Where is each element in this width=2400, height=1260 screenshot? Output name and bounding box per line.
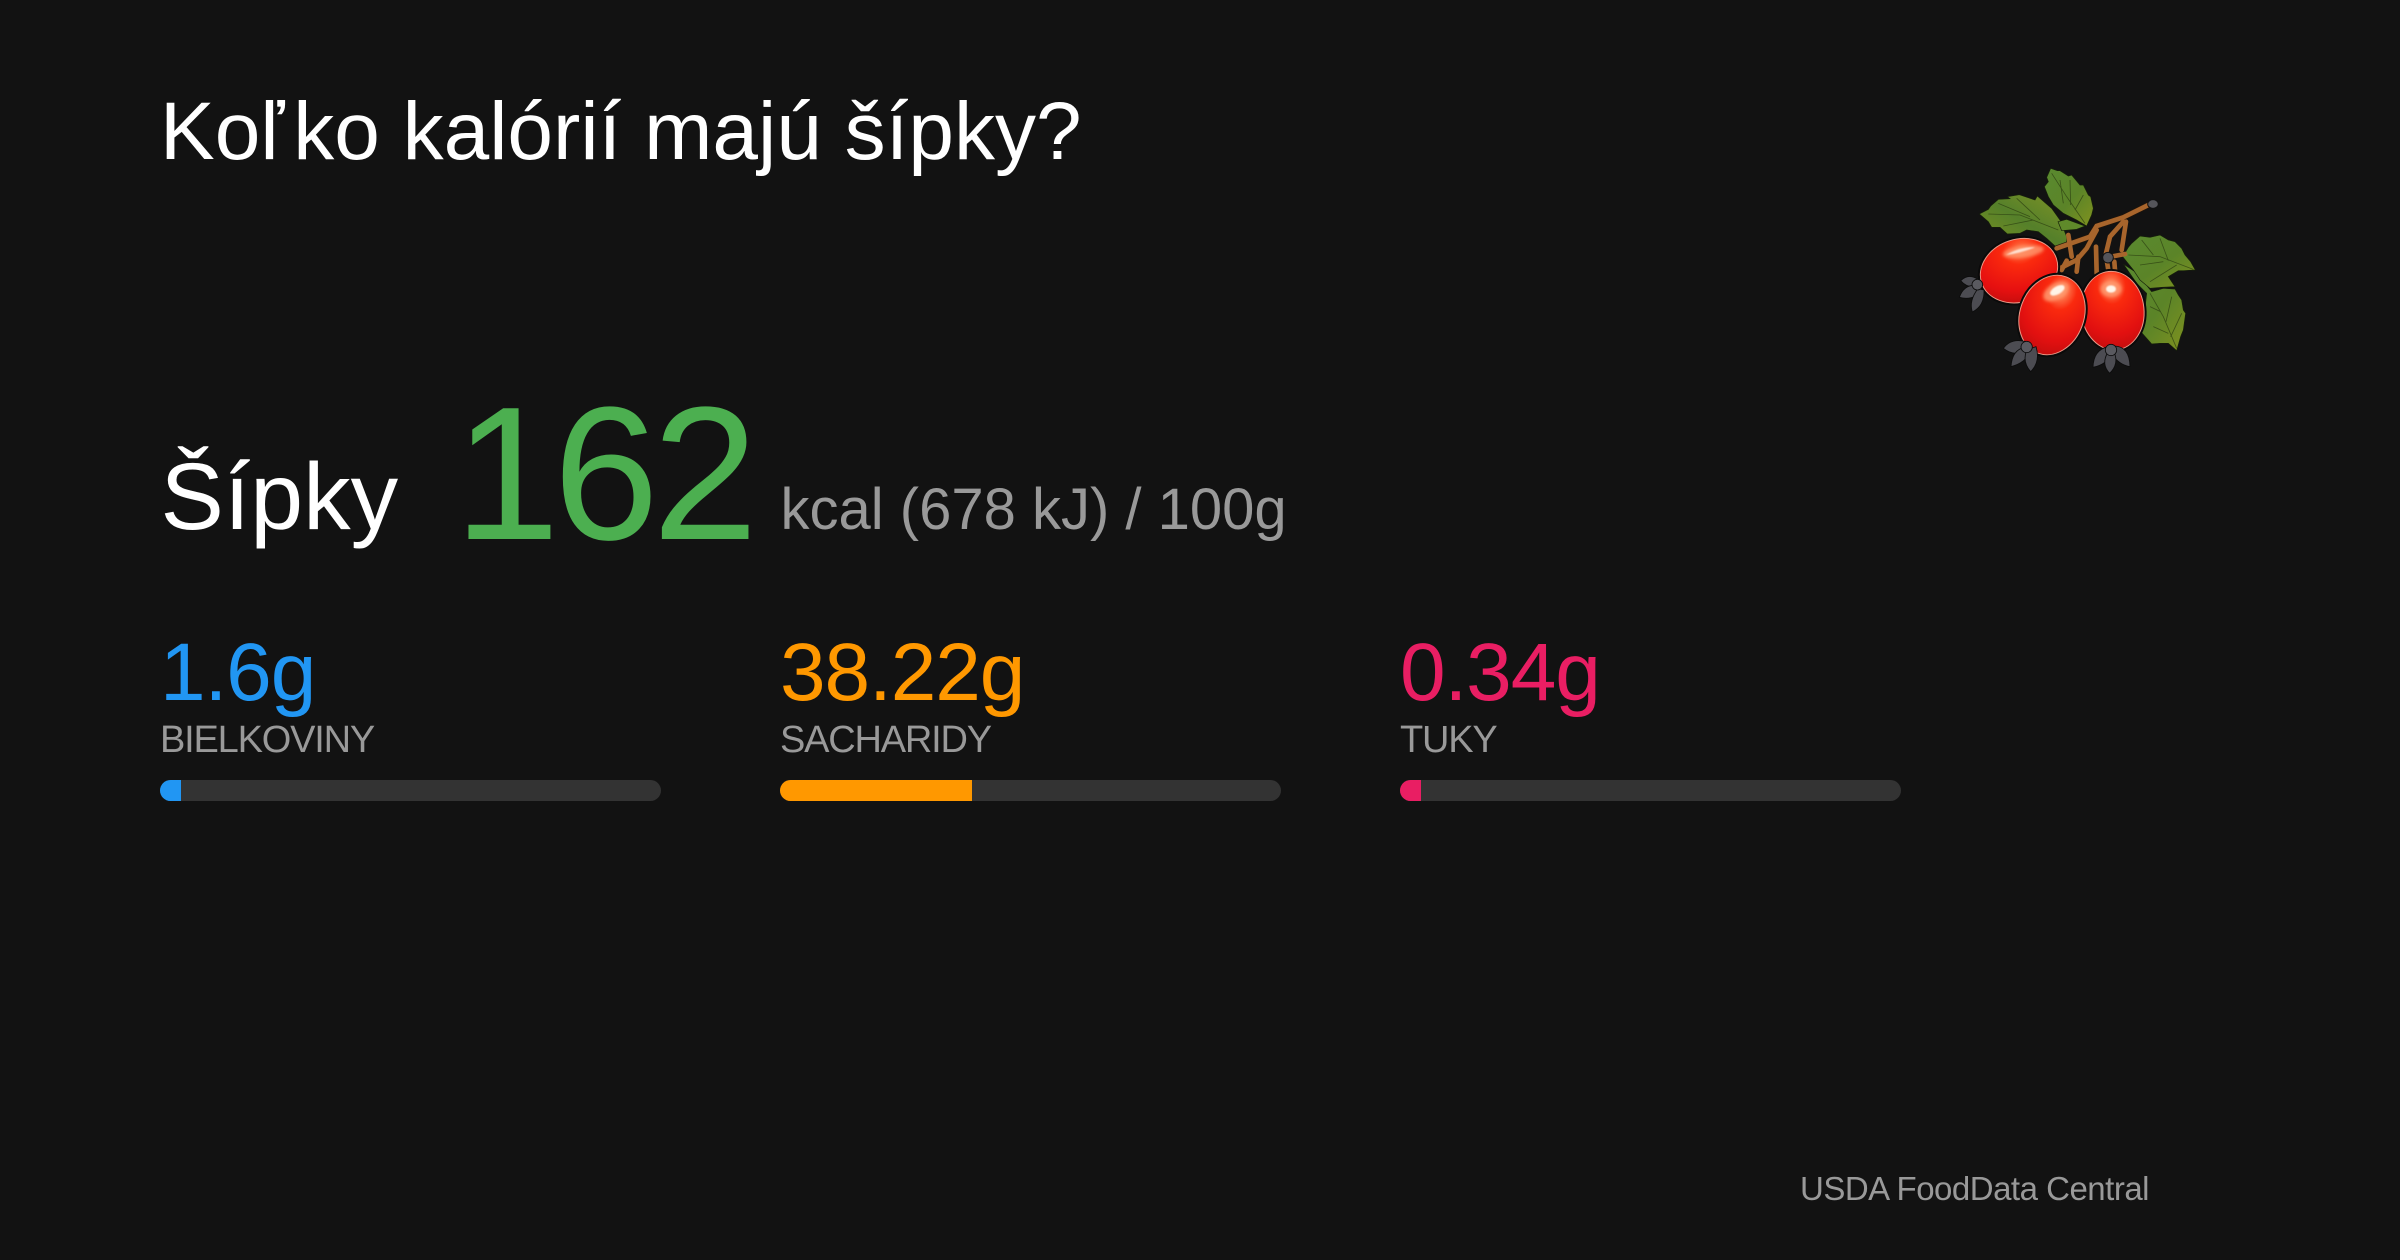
macro: carbohydrates [780,627,1281,801]
source: USDA FoodData Central [1800,1170,2149,1207]
protein value: 1.6g [160,627,315,718]
carbohydrate label: SACHARIDY [780,719,991,761]
leaves [1979,168,2195,351]
title: Koľko kalórií majú šípky? [160,86,1082,177]
fat label: TUKY [1400,719,1497,761]
carbohydrate value: 38.22g [780,627,1024,718]
icon: rose hips [1960,168,2196,372]
calorie unit: kcal (678 kJ) / 100g [780,477,1287,542]
sepals [1959,276,2130,373]
macro: protein [160,627,661,801]
carbohydrate bar [780,780,1281,801]
fat bar [1400,780,1901,801]
berries [1970,227,2149,366]
calorie value: 162 [454,368,752,580]
protein label: BIELKOVINY [160,719,374,761]
stems [2057,205,2148,273]
macro: fat [1400,627,1901,801]
fat value: 0.34g [1400,627,1600,718]
protein bar [160,780,661,801]
food name: Šípky [160,444,398,550]
